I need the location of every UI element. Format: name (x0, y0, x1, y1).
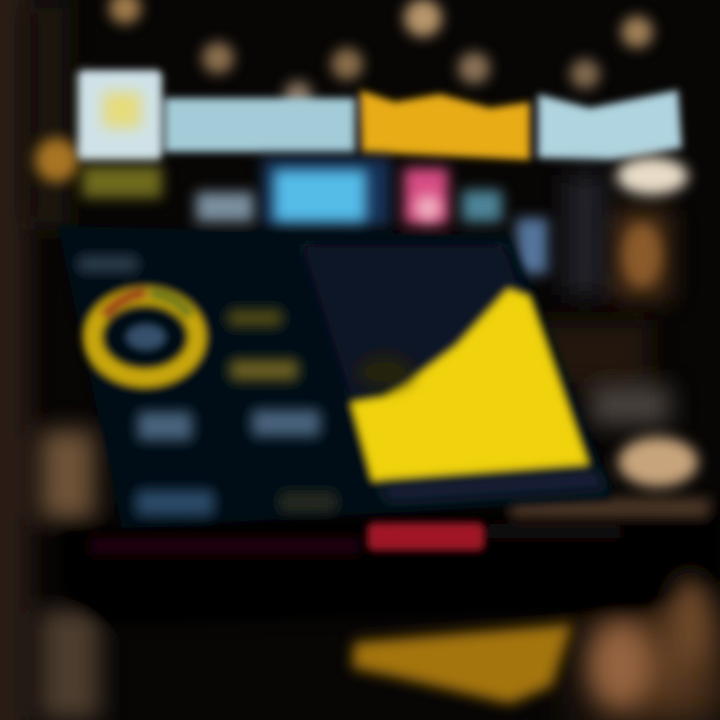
warm reflection on table right (510, 498, 710, 518)
tile: cyan (274, 170, 366, 222)
banner: pale blue right (538, 90, 682, 160)
glowing white light at right (616, 157, 688, 195)
tile: pink (404, 168, 448, 224)
top banner row (78, 70, 682, 160)
top bokeh lights (35, 0, 653, 182)
dashboard panel (58, 226, 612, 528)
laptop base and shadow (60, 498, 720, 625)
bright bokeh right (590, 223, 710, 707)
red accent bar (368, 523, 484, 550)
tile: olive (82, 166, 162, 198)
chart baseline glow (376, 470, 608, 502)
tile: pale blue side (516, 218, 548, 274)
icon: pale yellow square (103, 92, 141, 128)
legend text blocks (228, 310, 298, 380)
yellow area chart (350, 288, 590, 482)
tile: grey blue (196, 192, 254, 222)
stat blocks (136, 410, 336, 516)
banner: white tile (78, 70, 162, 160)
reflection of yellow chart on table (352, 624, 572, 704)
second row of coloured tiles (82, 158, 605, 295)
donut chart (93, 293, 197, 378)
banner: pale blue left (165, 98, 355, 152)
banner: yellow (360, 90, 530, 160)
tile: teal (462, 190, 502, 222)
panel heading block (78, 256, 138, 272)
tile: dark navy backing (262, 158, 390, 226)
